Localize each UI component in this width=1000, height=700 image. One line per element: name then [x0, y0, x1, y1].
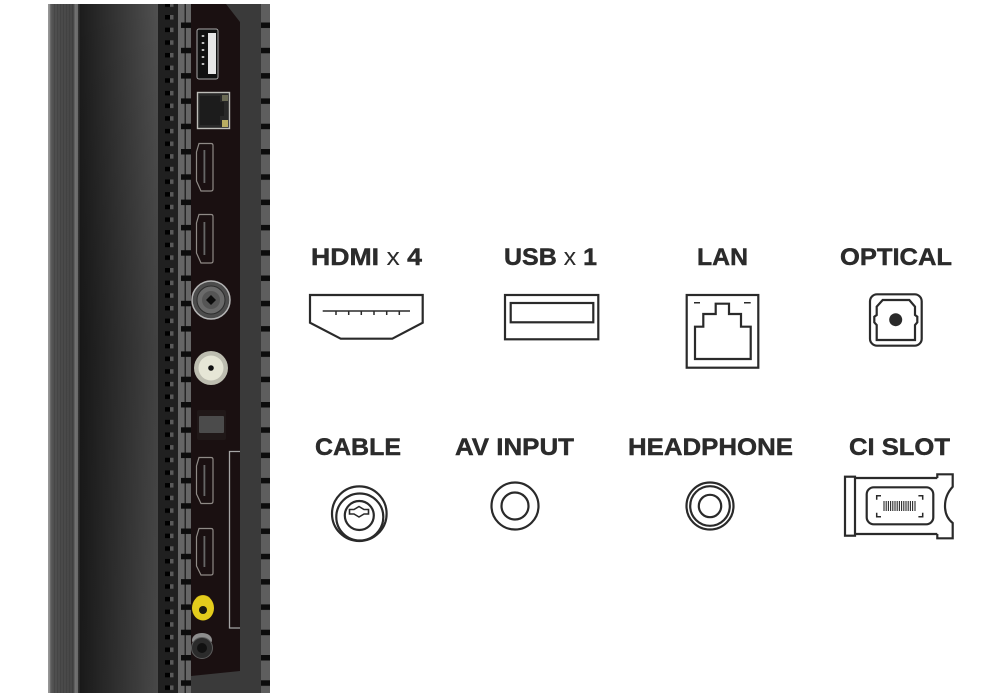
icon: USB: [505, 295, 598, 339]
icon: AV input: [492, 482, 538, 530]
label: CI SLOT: CI SLOT: [849, 434, 950, 461]
label: OPTICAL: OPTICAL: [840, 244, 952, 271]
label: HEADPHONE: HEADPHONE: [628, 434, 793, 461]
notched rail: [178, 4, 191, 693]
icon: optical: [870, 294, 922, 346]
icon: HDMI: [310, 295, 423, 339]
TV side photo: [48, 4, 270, 693]
label: HDMI x 4: HDMI x 4: [311, 244, 423, 271]
port: yellow AV: [192, 595, 214, 620]
CI slot outline: [230, 452, 240, 628]
label: CABLE: CABLE: [315, 434, 401, 461]
right housing: [191, 4, 270, 693]
port: LAN: [198, 92, 230, 128]
port panel: [191, 4, 240, 676]
port: headphone jack: [192, 281, 230, 319]
label: AV INPUT: AV INPUT: [455, 434, 574, 461]
port: round jack: [192, 633, 212, 658]
label: USB x 1: USB x 1: [504, 244, 597, 271]
icon: CI slot: [845, 474, 953, 538]
port: optical: [197, 410, 226, 440]
port: HDMI 2: [196, 214, 213, 263]
dark back panel: [80, 4, 158, 693]
icon: LAN: [687, 295, 758, 368]
ribbed bezel: [48, 4, 80, 693]
icon: headphone: [686, 482, 734, 530]
icon: cable: [332, 486, 387, 541]
port: cable antenna: [194, 351, 228, 385]
port: HDMI 1: [196, 144, 213, 191]
perforated vent strip: [158, 4, 178, 693]
label: LAN: LAN: [697, 244, 748, 271]
port: HDMI 3: [196, 458, 213, 504]
port: USB: [197, 29, 218, 79]
port: HDMI 4: [196, 528, 213, 575]
